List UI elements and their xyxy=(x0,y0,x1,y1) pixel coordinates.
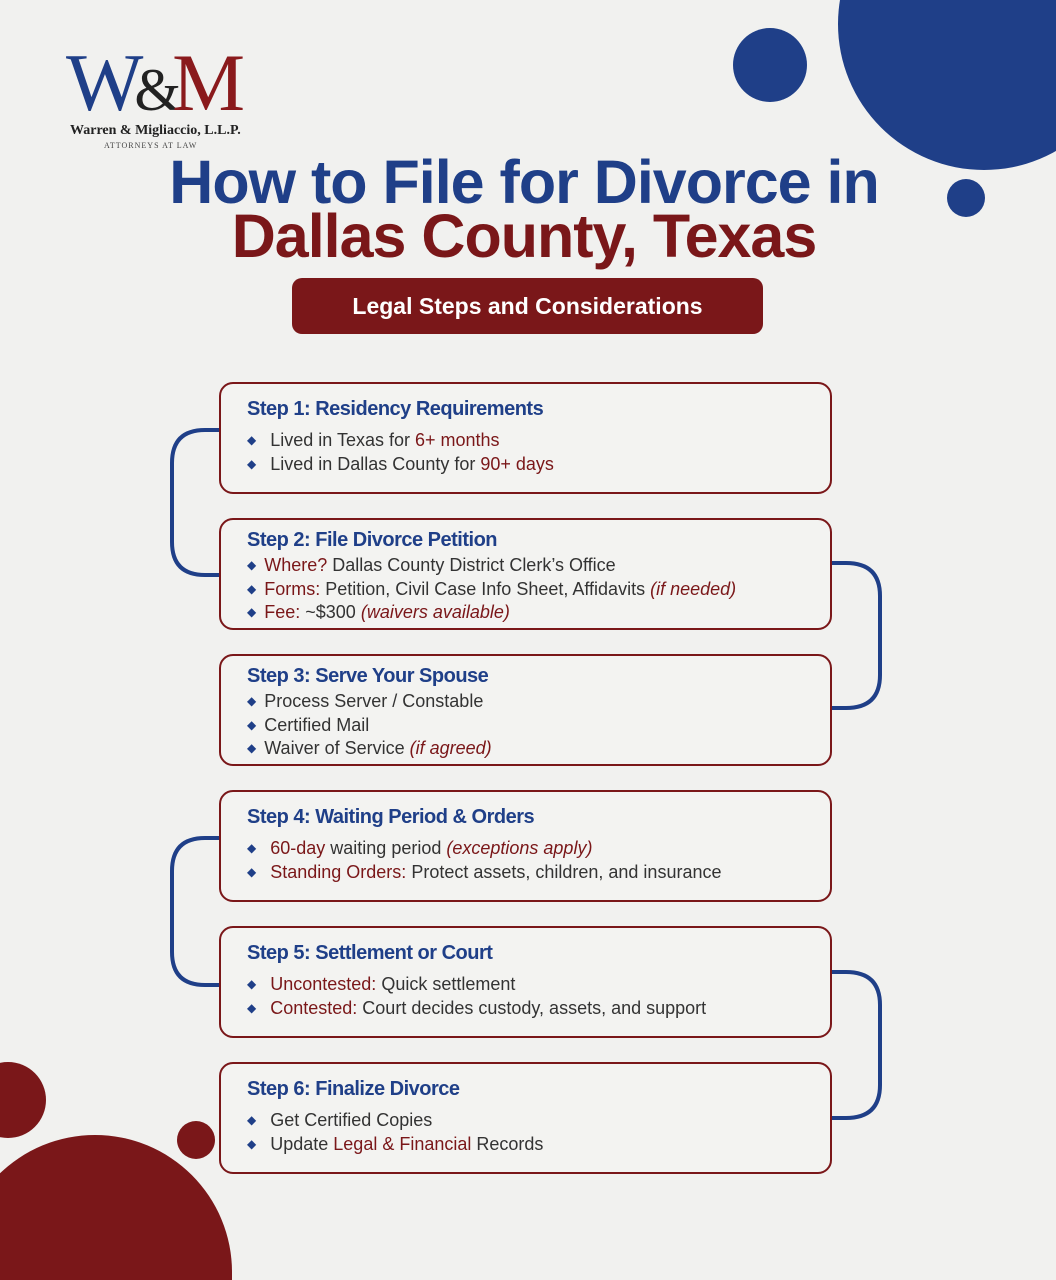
panel: step 3 xyxy=(219,654,832,766)
panel: step 1: Lived in Dallas County for 90+ days xyxy=(270,454,554,474)
decorative circle: top-right medium xyxy=(733,28,807,102)
subtitle banner xyxy=(292,278,763,334)
panel: step 2 xyxy=(219,518,832,630)
panel: step 4: 60-day waiting period (exceptions apply) xyxy=(270,838,592,858)
panel: step 5: Step 5: Settlement or Court xyxy=(247,942,492,964)
decorative circle: top-right small xyxy=(947,179,985,217)
decorative circle: bottom-left medium xyxy=(0,1062,46,1138)
panel: step 1 xyxy=(219,382,832,494)
panel: step 4: Standing Orders: Protect assets, children, and insurance xyxy=(270,862,721,882)
panel: step 2: Forms: Petition, Civil Case Info Sheet, Affidavits (if needed) xyxy=(264,578,736,598)
title: How to File for Divorce in xyxy=(169,148,879,216)
panel: step 1: Lived in Texas for 6+ months xyxy=(270,430,500,450)
panel: step 5: Uncontested: Quick settlement xyxy=(270,974,515,994)
logo: ATTORNEYS AT LAW xyxy=(104,141,197,150)
panel: step 3: Step 3: Serve Your Spouse xyxy=(247,665,488,687)
panel: step 3: Process Server / Constable xyxy=(264,691,483,711)
panel: step 2: Fee: ~$300 (waivers available) xyxy=(264,602,510,622)
panel: step 1: Step 1: Residency Requirements xyxy=(247,398,543,420)
panel: step 4 xyxy=(219,790,832,902)
panel: step 3: Certified Mail xyxy=(264,714,369,734)
decorative circle: bottom-left small xyxy=(177,1121,215,1159)
decorative circle: bottom-left large xyxy=(0,1135,232,1280)
panel: step 6: Get Certified Copies xyxy=(270,1110,432,1130)
panel: step 3: Waiver of Service (if agreed) xyxy=(264,738,492,758)
logo: Warren & Migliaccio, L.L.P. xyxy=(70,123,241,138)
panel: step 2: Where? Dallas County District Clerk’s Office xyxy=(264,555,616,575)
panel: step 5: Contested: Court decides custody, assets, and support xyxy=(270,998,706,1018)
panel: step 6 xyxy=(219,1062,832,1174)
panel: step 4: Step 4: Waiting Period & Orders xyxy=(247,806,534,828)
panel: step 5 xyxy=(219,926,832,1038)
panel: step 2: Step 2: File Divorce Petition xyxy=(247,529,497,551)
decorative circle: top-right large xyxy=(838,0,1056,170)
title xyxy=(169,148,879,270)
logo: W&M xyxy=(66,37,236,128)
subtitle banner: Legal Steps and Considerations xyxy=(352,293,703,319)
panel: step 6: Step 6: Finalize Divorce xyxy=(247,1078,460,1100)
title: Dallas County, Texas xyxy=(232,202,816,270)
panel: step 6: Update Legal & Financial Records xyxy=(270,1134,543,1154)
